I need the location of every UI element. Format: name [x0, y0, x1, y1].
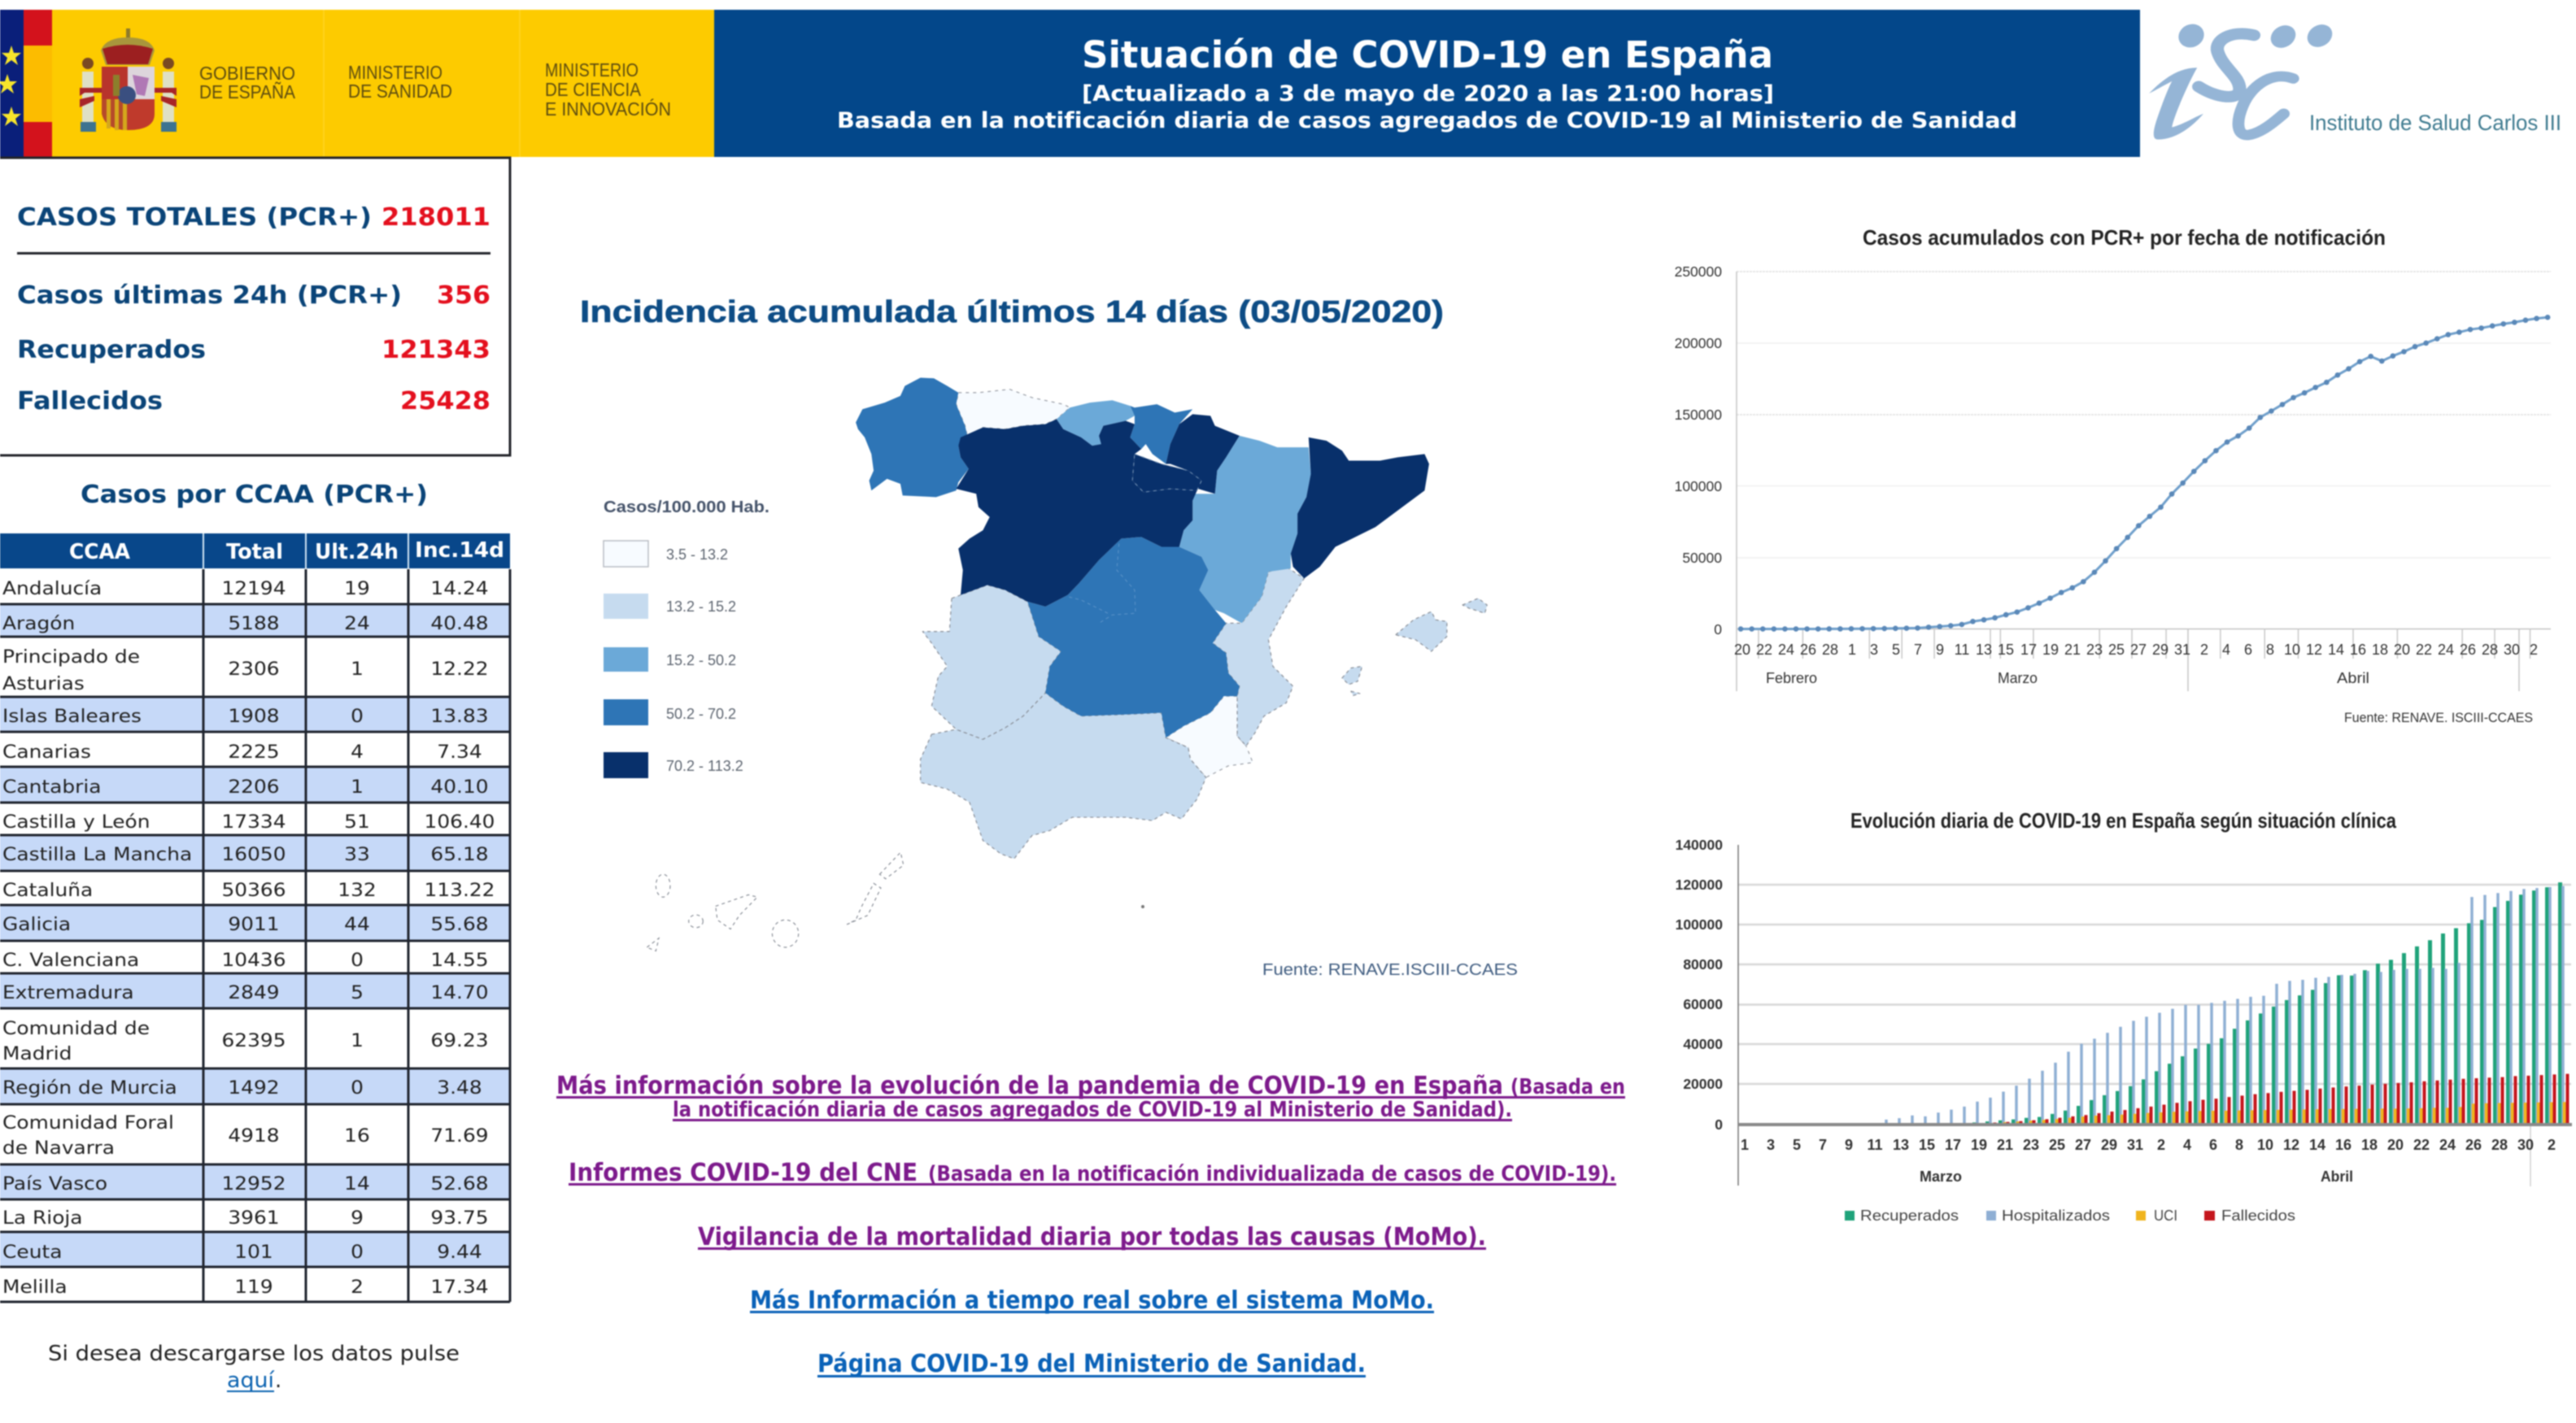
- table data: Extremadura: [2, 981, 134, 1003]
- source: chart 1: Fuente: RENAVE. ISCIII-CCAES: [2344, 710, 2533, 725]
- x axis labels: 13: [1893, 1137, 1909, 1153]
- region: Galicia: [856, 377, 969, 497]
- x axis labels: 9: [1936, 642, 1944, 658]
- table data: 16050: [221, 843, 286, 865]
- x axis labels: 10: [2284, 642, 2300, 658]
- region: Madrid border: [1068, 543, 1135, 623]
- y axis labels: 20000: [1683, 1076, 1723, 1092]
- map legend: 15.2 - 50.2: [666, 652, 736, 668]
- table data: 132: [338, 879, 377, 901]
- table data: 9.44: [437, 1241, 482, 1263]
- header band: [0, 10, 2561, 157]
- x axis labels: 26: [1800, 642, 1816, 658]
- x axis labels: 25: [2108, 642, 2125, 658]
- table data: Aragón: [2, 612, 75, 634]
- region: C. Valenciana: [1213, 567, 1304, 746]
- y axis labels: 100000: [1675, 478, 1722, 494]
- x axis labels: 2: [2200, 642, 2208, 658]
- subtitle: data basis: Basada en la notificación diaria de casos agregados de COVID-19 al Ministerio de Sanidad: [837, 108, 2017, 133]
- table data: 101: [234, 1241, 273, 1263]
- stat: casos ultimas 24h: Casos últimas 24h (PCR+): [17, 281, 402, 310]
- table data: 119: [234, 1276, 273, 1298]
- y axis labels: 150000: [1675, 407, 1722, 423]
- x axis labels: 2: [2548, 1137, 2556, 1153]
- x axis labels: 23: [2086, 642, 2103, 658]
- month labels: Marzo: [1998, 670, 2038, 686]
- y axis labels: 0: [1714, 621, 1722, 638]
- gridlines and axes: [1738, 885, 2571, 1084]
- x axis labels: 22: [2413, 1137, 2430, 1153]
- x axis labels: 29: [2152, 642, 2168, 658]
- icon: coat of arms: [80, 28, 177, 132]
- x axis labels: 6: [2244, 642, 2252, 658]
- gridlines and axes: [1737, 272, 2551, 415]
- subtitle: update date: [Actualizado a 3 de mayo de 2020 a las 21:00 horas]: [1082, 81, 1774, 107]
- x axis labels: 3: [1767, 1137, 1775, 1153]
- chart title: Evolución diaria de COVID-19 en España según situación clínica: [1850, 808, 2396, 833]
- month labels: Abril: [2337, 670, 2369, 686]
- table data: Cantabria: [2, 776, 102, 798]
- x axis labels: 19: [2042, 642, 2059, 658]
- region: Cataluna: [1291, 437, 1429, 578]
- table data: 5: [351, 981, 364, 1003]
- table data: 2: [351, 1276, 364, 1298]
- x axis labels: 11: [1955, 642, 1969, 658]
- text: ministries: DE CIENCIA: [545, 79, 642, 100]
- y axis labels: 80000: [1683, 956, 1723, 973]
- table data: de Navarra: [2, 1137, 115, 1159]
- text: ministries: DE SANIDAD: [348, 81, 452, 102]
- y axis labels: 100000: [1676, 916, 1723, 933]
- x axis labels: 6: [2209, 1137, 2217, 1153]
- y axis labels: [1676, 837, 1723, 1133]
- logo: Instituto de Salud Carlos III: Instituto de Salud Carlos III: [2309, 111, 2561, 135]
- x axis labels: 4: [2222, 642, 2230, 658]
- stat: casos totales: 218011: [381, 203, 490, 232]
- x axis labels: 19: [1971, 1137, 1987, 1153]
- x axis labels: 2: [2157, 1137, 2165, 1153]
- table data: Galicia: [2, 913, 71, 935]
- region: Navarra: [1166, 414, 1240, 494]
- x axis labels: 17: [1945, 1137, 1961, 1153]
- map legend: 3.5 - 13.2: [666, 546, 728, 563]
- table data: 69.23: [430, 1029, 489, 1051]
- table data: 24: [344, 612, 370, 634]
- map legend: 70.2 - 113.2: [666, 758, 743, 774]
- y axis labels: 40000: [1683, 1036, 1723, 1052]
- x axis labels: 16: [2350, 642, 2366, 658]
- month labels: Marzo: [1920, 1168, 1962, 1185]
- region: La Rioja: [1132, 454, 1201, 492]
- chart: evolucion diaria: [1676, 808, 2572, 1224]
- panel: summary totals: [0, 158, 510, 455]
- x axis labels: 26: [2460, 642, 2476, 658]
- table data: 65.18: [430, 843, 489, 865]
- stat: recuperados: 121343: [381, 336, 490, 364]
- logo: Gobierno de España: [0, 10, 714, 157]
- title banner: [714, 10, 2140, 157]
- region: Asturias: [957, 389, 1070, 436]
- line series: [1741, 317, 2548, 629]
- heading: map title: Incidencia acumulada últimos 14 días (03/05/2020): [580, 295, 1444, 329]
- link: MoMo tiempo real: Más Información a tiempo real sobre el sistema MoMo.: [750, 1286, 1434, 1315]
- chart legend: Hospitalizados: [2002, 1208, 2110, 1224]
- table data: 40.10: [430, 776, 489, 798]
- table header: [0, 533, 510, 568]
- table data: Región de Murcia: [2, 1077, 177, 1099]
- x axis labels: 13: [1976, 642, 1992, 658]
- table data: 0: [351, 1077, 364, 1099]
- table data: 7.34: [437, 741, 482, 763]
- region: Castilla-La Mancha and Madrid: [1027, 537, 1240, 738]
- x axis labels: 26: [2465, 1137, 2482, 1153]
- icon: EU and Spanish flag strip: [0, 10, 52, 157]
- x axis labels: 22: [2416, 642, 2432, 658]
- table data: 44: [344, 913, 370, 935]
- table data: Ceuta: [2, 1241, 62, 1263]
- x axis labels: 25: [2049, 1137, 2065, 1153]
- x axis labels: 29: [2101, 1137, 2117, 1153]
- x axis labels: 2: [2530, 642, 2538, 658]
- stat: casos totales: CASOS TOTALES (PCR+): [17, 203, 372, 232]
- table data: Melilla: [2, 1276, 68, 1298]
- series: hospitalizados: [1873, 886, 2563, 1125]
- series: UCI: [1940, 1102, 2565, 1125]
- link: Ministerio de Sanidad: Página COVID-19 del Ministerio de Sanidad.: [817, 1350, 1366, 1378]
- x axis labels: 5: [1892, 642, 1900, 658]
- table data: 9011: [228, 913, 280, 935]
- month labels: [1920, 1168, 2353, 1185]
- x axis labels: 24: [2438, 642, 2454, 658]
- table data: 1908: [228, 705, 280, 727]
- region: Extremadura: [922, 585, 1061, 739]
- map legend: 50.2 - 70.2: [666, 706, 736, 722]
- table data: 71.69: [430, 1125, 489, 1147]
- table data: 17334: [221, 811, 286, 833]
- chart legend: UCI: [2154, 1208, 2177, 1224]
- x axis labels: 11: [1867, 1137, 1883, 1153]
- table data: 16: [344, 1125, 370, 1147]
- table data: País Vasco: [2, 1173, 107, 1195]
- text: ministries: MINISTERIO: [545, 59, 639, 81]
- y axis labels: 60000: [1683, 996, 1723, 1012]
- month labels: Abril: [2321, 1168, 2353, 1185]
- table data: 106.40: [425, 811, 495, 833]
- table header: CCAA: [69, 540, 130, 564]
- table data: 2306: [228, 658, 280, 680]
- x axis labels: 3: [1870, 642, 1878, 658]
- x axis labels: 24: [2439, 1137, 2456, 1153]
- table data: 12.22: [430, 658, 489, 680]
- table data: [2, 577, 495, 1298]
- table data: 0: [351, 705, 364, 727]
- x axis labels: 28: [2482, 642, 2498, 658]
- table data: 3.48: [437, 1077, 482, 1099]
- text: data download note: aquí: [227, 1369, 275, 1393]
- map legend: 13.2 - 15.2: [666, 598, 736, 615]
- table data: 2849: [228, 981, 280, 1003]
- x axis labels: 18: [2361, 1137, 2378, 1153]
- region: Murcia: [1166, 696, 1253, 777]
- table data: 2225: [228, 741, 280, 763]
- table data: 40.48: [430, 612, 489, 634]
- text: ministries: GOBIERNO: [199, 63, 295, 84]
- chart title: Casos acumulados con PCR+ por fecha de notificación: [1863, 225, 2386, 250]
- x axis labels: 17: [2020, 642, 2037, 658]
- table data: Cataluña: [2, 879, 93, 901]
- table data: 4918: [228, 1125, 280, 1147]
- table data: 50366: [221, 879, 286, 901]
- month labels: [1766, 670, 2369, 686]
- x axis labels: 15: [1919, 1137, 1935, 1153]
- links list: [556, 1072, 1625, 1378]
- table data: Madrid: [2, 1042, 72, 1064]
- table data: 9: [351, 1207, 364, 1229]
- x axis labels: 12: [2283, 1137, 2299, 1153]
- map legend: [604, 498, 769, 778]
- logo: Instituto de Salud Carlos III: [2149, 20, 2561, 139]
- table data: 14.70: [430, 981, 489, 1003]
- region: Aragon: [1179, 436, 1311, 623]
- table data: Andalucía: [2, 577, 102, 599]
- x axis labels: 20: [2394, 642, 2410, 658]
- table data: 93.75: [430, 1207, 489, 1229]
- table data: 12952: [221, 1173, 286, 1195]
- link: evolucion pandemia: Más información sobre la evolución de la pandemia de COVID-19 en España: [556, 1072, 1503, 1100]
- y axis labels: [1675, 263, 1722, 638]
- x axis labels: 27: [2075, 1137, 2091, 1153]
- title: Situación de COVID-19 en España: [1082, 33, 1773, 76]
- stat: fallecidos: [17, 387, 490, 416]
- stat: casos totales: [17, 203, 490, 232]
- x axis labels: 24: [1778, 642, 1794, 658]
- x axis labels: 30: [2504, 642, 2520, 658]
- table data: 51: [344, 811, 370, 833]
- x axis labels: 7: [1914, 642, 1922, 658]
- link: informes CNE: [569, 1159, 1616, 1187]
- series: recuperados: [1923, 882, 2561, 1125]
- x axis labels: 20: [1734, 642, 1750, 658]
- x axis labels: [1741, 1137, 2556, 1153]
- x axis labels: 7: [1819, 1137, 1827, 1153]
- region: Baleares: [1342, 598, 1487, 695]
- table data: 10436: [221, 949, 286, 971]
- table data: 1: [351, 1029, 364, 1051]
- y axis labels: 250000: [1675, 263, 1722, 280]
- text: data download note: Si desea descargarse los datos pulse: [48, 1342, 460, 1366]
- text: ministries: E INNOVACIÓN: [545, 98, 671, 120]
- x axis labels: 30: [2517, 1137, 2534, 1153]
- table data: Principado de: [2, 646, 140, 668]
- x axis labels: 28: [2491, 1137, 2508, 1153]
- table data: Asturias: [2, 672, 85, 694]
- text: data download note: [48, 1342, 460, 1393]
- chart: casos acumulados: [1675, 225, 2551, 725]
- x axis labels: 14: [2309, 1137, 2325, 1153]
- chart legend: [1845, 1208, 2295, 1224]
- chart legend: Fallecidos: [2221, 1208, 2295, 1224]
- table data: 13.83: [430, 705, 489, 727]
- x axis labels: 31: [2127, 1137, 2143, 1153]
- table data: 52.68: [430, 1173, 489, 1195]
- link: MoMo vigilancia: Vigilancia de la mortalidad diaria por todas las causas (MoMo).: [698, 1223, 1486, 1251]
- y axis labels: 0: [1715, 1116, 1723, 1133]
- x axis labels: 8: [2235, 1137, 2243, 1153]
- y axis labels: 200000: [1675, 335, 1722, 351]
- table data: 62395: [221, 1029, 286, 1051]
- x axis labels: 28: [1822, 642, 1838, 658]
- table data: Comunidad de: [2, 1017, 150, 1039]
- table data: 2206: [228, 776, 280, 798]
- table data: Castilla La Mancha: [2, 843, 192, 865]
- table: cases by autonomous community: [0, 533, 510, 1302]
- table data: 17.34: [430, 1276, 489, 1298]
- x axis labels: 22: [1756, 642, 1772, 658]
- link: evolucion pandemia: la notificación diaria de casos agregados de COVID-19 al Ministerio de Sanidad).: [673, 1098, 1512, 1122]
- table header: Total: [226, 540, 283, 564]
- table data: Islas Baleares: [2, 705, 142, 727]
- table data: 4: [351, 741, 364, 763]
- table data: C. Valenciana: [2, 949, 139, 971]
- month labels: Febrero: [1766, 670, 1817, 686]
- table data: 12194: [221, 577, 286, 599]
- y axis labels: 50000: [1682, 550, 1722, 566]
- marker: Melilla: [1141, 905, 1144, 908]
- x axis labels: 23: [2023, 1137, 2039, 1153]
- table data: 55.68: [430, 913, 489, 935]
- stat: fallecidos: Fallecidos: [17, 387, 163, 416]
- region: Castilla y Leon: [957, 419, 1197, 607]
- x axis labels: 4: [2183, 1137, 2191, 1153]
- region: Canarias: [647, 852, 904, 951]
- table data: 19: [344, 577, 370, 599]
- source: map: Fuente: RENAVE.ISCIII-CCAES: [1262, 961, 1518, 979]
- table data: La Rioja: [2, 1207, 83, 1229]
- table data: 1: [351, 658, 364, 680]
- table header: Inc.14d: [415, 538, 504, 563]
- table data: 14.24: [430, 577, 489, 599]
- x axis labels: 21: [1997, 1137, 2013, 1153]
- x axis labels: [1734, 642, 2538, 658]
- x axis labels: 1: [1741, 1137, 1749, 1153]
- stat: casos ultimas 24h: 356: [437, 281, 490, 310]
- x axis labels: 8: [2266, 642, 2274, 658]
- table header: Ult.24h: [315, 540, 399, 564]
- table data: 0: [351, 1241, 364, 1263]
- table data: Comunidad Foral: [2, 1112, 174, 1134]
- table data: 1: [351, 776, 364, 798]
- choropleth map of Spain: [856, 377, 1487, 859]
- link: informes CNE: Informes COVID-19 del CNE: [569, 1159, 918, 1187]
- stat: recuperados: Recuperados: [17, 336, 206, 364]
- x axis labels: 20: [2387, 1137, 2404, 1153]
- link: evolucion pandemia: [556, 1072, 1625, 1122]
- stat: recuperados: [17, 336, 490, 364]
- link: informes CNE: (Basada en la notificación individualizada de casos de COVID-19).: [928, 1162, 1616, 1186]
- x axis labels: 21: [2064, 642, 2081, 658]
- table data: 5188: [228, 612, 280, 634]
- link: evolucion pandemia: (Basada en: [1510, 1075, 1625, 1099]
- x axis labels: 10: [2257, 1137, 2273, 1153]
- table data: 0: [351, 949, 364, 971]
- text: data download note: .: [275, 1369, 281, 1393]
- region: Pais Vasco: [1130, 404, 1192, 464]
- table data: 1492: [228, 1077, 280, 1099]
- table data: 33: [344, 843, 370, 865]
- map legend: Casos/100.000 Hab.: [604, 498, 769, 516]
- table data: Canarias: [2, 741, 91, 763]
- x axis labels: 5: [1793, 1137, 1801, 1153]
- text: ministries: [199, 59, 671, 120]
- region: Cantabria: [1057, 400, 1135, 446]
- x axis labels: 1: [1848, 642, 1856, 658]
- series: fallecidos: [1955, 1074, 2567, 1125]
- x axis labels: 12: [2306, 642, 2322, 658]
- region: Andalucia: [921, 693, 1206, 859]
- y axis labels: 140000: [1676, 837, 1723, 853]
- x axis labels: 31: [2174, 642, 2190, 658]
- table data: 3961: [228, 1207, 280, 1229]
- heading: casos por CCAA: Casos por CCAA (PCR+): [81, 481, 428, 509]
- x axis labels: 9: [1845, 1137, 1853, 1153]
- chart legend: Recuperados: [1860, 1208, 1959, 1224]
- table data: 14: [344, 1173, 370, 1195]
- table data: Castilla y León: [2, 811, 150, 833]
- text: ministries: DE ESPAÑA: [199, 81, 296, 102]
- table row shading and grid: [0, 569, 510, 1302]
- stat: fallecidos: 25428: [400, 387, 490, 416]
- text: ministries: MINISTERIO: [348, 62, 442, 83]
- x axis labels: 27: [2130, 642, 2147, 658]
- x axis labels: 14: [2328, 642, 2344, 658]
- x axis labels: 16: [2335, 1137, 2352, 1153]
- y axis labels: 120000: [1676, 877, 1723, 893]
- table data: 113.22: [425, 879, 495, 901]
- x axis labels: 18: [2372, 642, 2388, 658]
- table data: 14.55: [430, 949, 489, 971]
- x axis labels: 15: [1998, 642, 2014, 658]
